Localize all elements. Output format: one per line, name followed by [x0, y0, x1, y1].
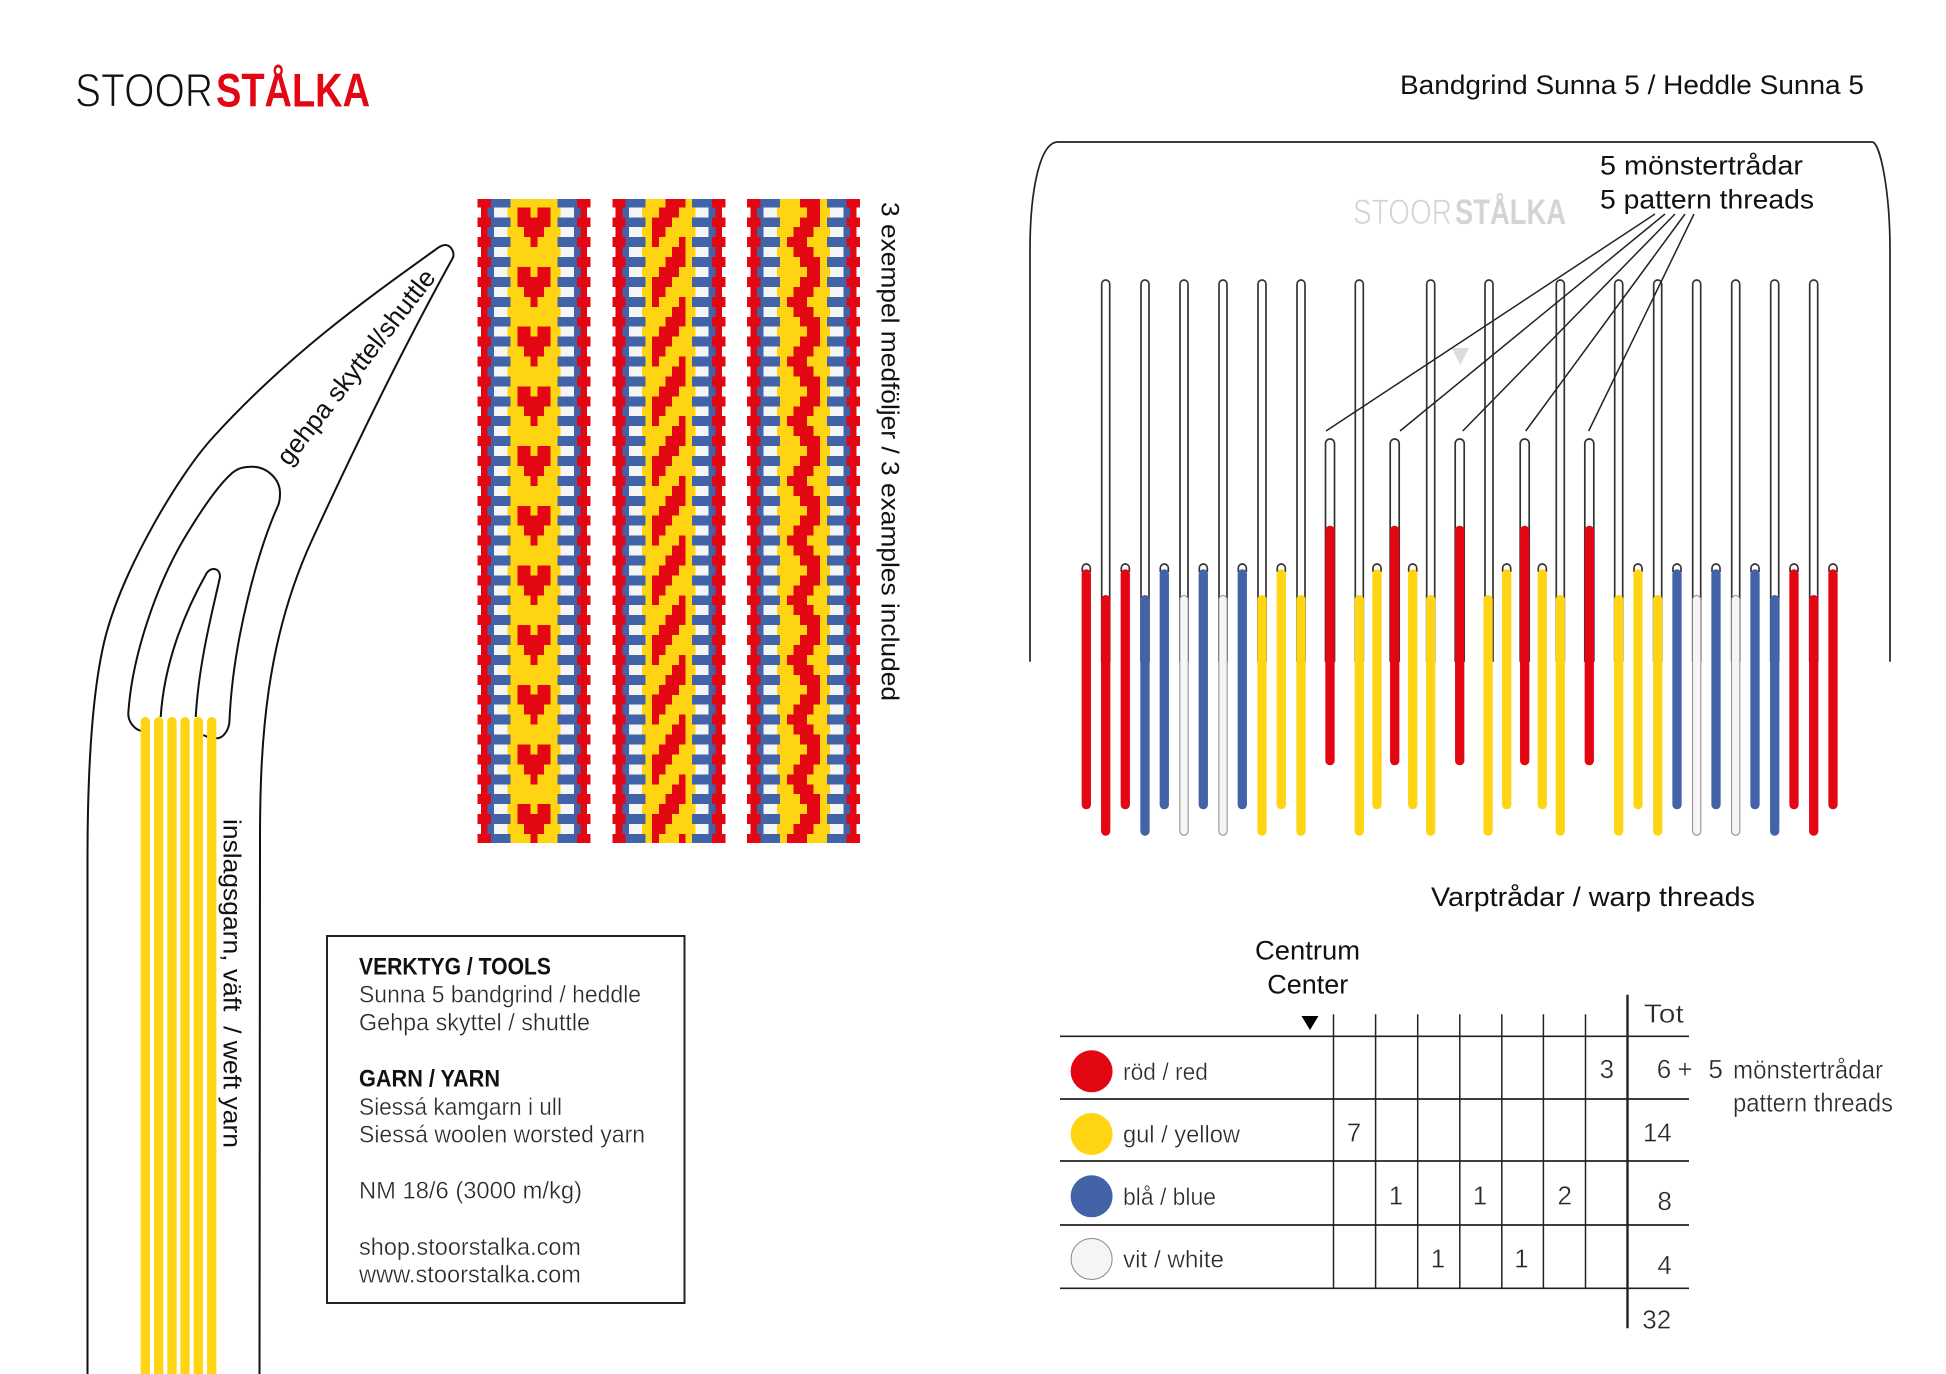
text: tools list: Sunna 5 bandgrind / heddle [359, 982, 641, 1009]
text: tools list [359, 982, 641, 1037]
row: white: 1 [1431, 1244, 1445, 1274]
heading: heddle name: Bandgrind Sunna 5 / Heddle Sunna 5 [1400, 70, 1864, 100]
centre label [1255, 935, 1360, 1000]
row: white: vit / white [1123, 1247, 1224, 1274]
row: blue [1071, 1175, 1672, 1217]
centre label: Centrum [1255, 935, 1360, 965]
row: red [1071, 1050, 1693, 1092]
band: diagonal pattern [612, 197, 725, 854]
text: tools list: Gehpa skyttel / shuttle [359, 1010, 590, 1037]
heddle frame outline [1030, 142, 1890, 662]
callout text: 5 pattern threads [1600, 185, 1814, 215]
row: white [1071, 1238, 1672, 1280]
watermark logo [1353, 192, 1566, 232]
total column header: Tot [1644, 999, 1685, 1029]
row: yellow: gul / yellow [1123, 1122, 1241, 1149]
shuttle label: gehpa skyttel/shuttle [270, 263, 441, 471]
heading: tools: VERKTYG / TOOLS [359, 953, 551, 980]
row: yellow: 14 [1643, 1118, 1672, 1148]
row: blue: 8 [1657, 1186, 1672, 1216]
table grid [1060, 995, 1689, 1328]
heading: yarn: GARN / YARN [359, 1066, 500, 1093]
note: pattern threads: pattern threads [1733, 1088, 1893, 1118]
row: red: 3 [1600, 1054, 1614, 1084]
pattern bands: three examples [478, 197, 860, 854]
band: wave pattern [747, 197, 860, 854]
weft yarn threads [141, 717, 216, 1374]
row: blue: blå / blue [1123, 1184, 1216, 1211]
row: white: 1 [1514, 1244, 1529, 1274]
centre marker [1302, 1016, 1318, 1030]
note: pattern threads: mönstertrådar [1733, 1054, 1883, 1084]
text: yarn description: Siessá woolen worsted yarn [359, 1122, 645, 1149]
text: web addresses: www.stoorstalka.com [358, 1262, 581, 1289]
text: web addresses [358, 1234, 581, 1289]
heddle holes [1082, 564, 1837, 572]
row: red: röd / red [1123, 1059, 1208, 1086]
shuttle notch [128, 467, 280, 738]
caption: warp threads: Varptrådar / warp threads [1431, 882, 1755, 912]
weft yarn label: inslagsgarn, väft / weft yarn [218, 819, 246, 1148]
callout text: 5 mönstertrådar [1600, 150, 1803, 180]
row: blue: 1 [1389, 1180, 1403, 1210]
watermark logo: STOOR [1353, 193, 1452, 232]
heddle slots [1102, 280, 1818, 662]
watermark logo: STÅLKA [1455, 192, 1566, 232]
row: red: 6 [1657, 1054, 1671, 1084]
note: pattern threads: 5 [1708, 1054, 1723, 1084]
shuttle outline [88, 245, 454, 1374]
rotated label: examples included: 3 exempel medföljer / 3 examples included [876, 202, 904, 701]
centre label: Center [1267, 970, 1348, 1000]
callout: pattern threads [1326, 150, 1814, 431]
shuttle illustration [88, 245, 454, 1374]
text: web addresses: shop.stoorstalka.com [359, 1234, 581, 1261]
row: yellow [1071, 1113, 1672, 1155]
band: heart pattern [478, 197, 590, 854]
row: red: + [1677, 1054, 1693, 1084]
row: blue: 1 [1473, 1180, 1487, 1210]
text: yarn weight: NM 18/6 (3000 m/kg) [359, 1177, 582, 1204]
panel: tools and yarn [327, 936, 684, 1303]
logo: Stoorstålka: STÅLKA [216, 64, 370, 117]
callout leader lines [1326, 214, 1694, 431]
row: yellow: 7 [1347, 1118, 1361, 1148]
grand total: 32 [1642, 1304, 1671, 1334]
pattern thread slots [1326, 439, 1594, 662]
logo: Stoorstålka: STOOR [75, 64, 213, 117]
warp threads in slots [1101, 595, 1818, 836]
pattern threads [1325, 526, 1594, 765]
logo: Stoorstålka [75, 64, 370, 117]
callout text [1600, 150, 1814, 215]
row: white: 4 [1657, 1250, 1672, 1280]
text: yarn description [359, 1094, 645, 1149]
warp threads in holes [1082, 569, 1838, 809]
threading table [1060, 935, 1893, 1334]
shuttle prong [161, 569, 220, 717]
row: blue: 2 [1557, 1180, 1572, 1210]
watermark centre marker [1452, 348, 1469, 365]
note: pattern threads [1708, 1054, 1893, 1118]
text: yarn description: Siessá kamgarn i ull [359, 1094, 562, 1121]
